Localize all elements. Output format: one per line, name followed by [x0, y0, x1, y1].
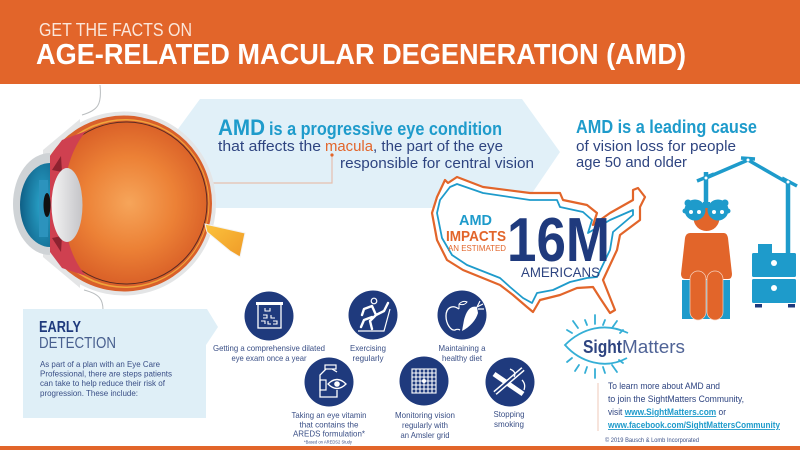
main title: AGE-RELATED MACULAR DEGENERATION (AMD): [36, 39, 686, 71]
icon: eye cross-section: [13, 85, 245, 310]
label: diet: healthy diet: [442, 353, 483, 363]
definition line one start: that affects the: [218, 138, 321, 155]
footer band: [0, 446, 800, 450]
optic nerve: [205, 224, 245, 257]
panel: AMD definition arrow: [170, 99, 560, 208]
early detection body: [40, 360, 172, 398]
label: stop smoking: Stopping: [494, 409, 525, 419]
early detection heading bold: EARLY: [39, 319, 81, 336]
cornea: [13, 153, 50, 255]
stat label AMERICANS: AMERICANS: [521, 264, 600, 280]
eye muscles lines: [82, 85, 103, 310]
label: amsler grid: Monitoring vision: [395, 410, 455, 420]
sclera: [32, 112, 216, 296]
label: amsler grid: an Amsler grid: [400, 430, 450, 440]
step: exercise: [348, 290, 398, 363]
label: eye vitamin: [292, 410, 367, 438]
retina layers: [76, 119, 210, 288]
phoropter: [682, 200, 730, 220]
logo wordmark bold: Sight: [583, 337, 622, 357]
panel: leading cause text: [576, 117, 757, 171]
SightMatters logo: [565, 315, 685, 378]
patient legs: [690, 271, 706, 320]
stat label AN ESTIMATED: AN ESTIMATED: [448, 244, 506, 253]
leading cause line one: of vision loss for people: [576, 138, 736, 155]
US map statistic: [432, 177, 645, 313]
early detection body: can take to help reduce their risk of: [40, 379, 166, 388]
header kicker: GET THE FACTS ON: [39, 20, 192, 40]
step: stop smoking: [486, 358, 534, 429]
map outer outline: [432, 177, 645, 313]
icon: runner on treadmill: [348, 290, 398, 340]
icon: patient at eye exam equipment: [681, 158, 797, 320]
definition heading continued: is a progressive eye condition: [269, 119, 502, 139]
step: amsler grid: [395, 356, 455, 440]
lens: [52, 168, 82, 242]
learn more line four: www.facebook.com/SightMattersCommunity: [607, 420, 780, 430]
stat label AMD: AMD: [459, 212, 492, 229]
logo wordmark light: Matters: [622, 337, 685, 357]
definition line one end: , the part of the eye: [373, 138, 503, 155]
learn more line three: visit www.SightMatters.com or: [608, 407, 726, 417]
step: eye exam: [213, 292, 325, 363]
icon: vitamin bottle with eye: [304, 358, 354, 406]
early detection body: progression. These include:: [40, 389, 138, 398]
label: eye vitamin: AREDS formulation*: [293, 428, 366, 438]
label: diet: Maintaining a: [438, 343, 486, 353]
label: exercise: Exercising: [350, 343, 386, 353]
footnote: *Based on AREDS2 Study: [304, 440, 353, 444]
equipment arm: [697, 158, 797, 253]
logo eye outline: [565, 327, 628, 364]
label: eye vitamin: Taking an eye vitamin: [292, 410, 367, 420]
learn more line one: To learn more about AMD and: [608, 381, 720, 391]
early detection body: As part of a plan with an Eye Care: [40, 360, 161, 369]
leading cause line two: age 50 and older: [576, 154, 687, 171]
early detection body: Professional, there are steps patients: [40, 370, 172, 378]
icon: crossed cigarette: [486, 358, 534, 406]
macula highlight: macula: [325, 138, 374, 155]
patient head: [694, 205, 720, 231]
label: eye vitamin: that contains the: [300, 420, 359, 430]
cabinet: [752, 244, 796, 303]
label: eye exam: Getting a comprehensive dilated: [213, 343, 325, 353]
callout: learn more: [598, 381, 780, 431]
label: eye exam: [213, 343, 325, 363]
vitreous: [68, 122, 206, 284]
step: diet: [438, 290, 486, 363]
iris: [39, 180, 48, 237]
panel: early detection: [23, 309, 218, 418]
leading cause heading: AMD is a leading cause: [576, 117, 757, 137]
chair: [682, 280, 730, 319]
label: stop smoking: smoking: [494, 419, 524, 429]
label: stop smoking: [494, 409, 525, 429]
early detection heading light: DETECTION: [39, 335, 116, 352]
learn more line two: to join the SightMatters Community,: [608, 394, 744, 404]
leader line to macula: [210, 153, 334, 183]
definition heading: AMD: [218, 115, 265, 140]
label: amsler grid: regularly with: [402, 420, 448, 430]
patient body: [681, 233, 732, 279]
stat label IMPACTS: IMPACTS: [446, 228, 506, 245]
icon: apple and carrot: [438, 290, 486, 340]
header band: [0, 0, 800, 84]
step: eye vitamin: [292, 358, 367, 444]
label: exercise: regularly: [352, 353, 384, 363]
ciliary body: [50, 131, 86, 276]
stat number 16M: 16M: [507, 206, 610, 275]
icon: amsler grid: [400, 356, 448, 406]
label: eye exam: eye exam once a year: [232, 353, 307, 363]
label: exercise: [350, 343, 386, 363]
label: diet: [438, 343, 486, 363]
label: amsler grid: [395, 410, 455, 440]
copyright: © 2019 Bausch & Lomb Incorporated: [605, 437, 699, 444]
icon: eye chart: [244, 292, 294, 340]
map inner outline: [437, 184, 633, 303]
logo rays: [567, 315, 623, 378]
definition line two: responsible for central vision: [340, 155, 534, 172]
